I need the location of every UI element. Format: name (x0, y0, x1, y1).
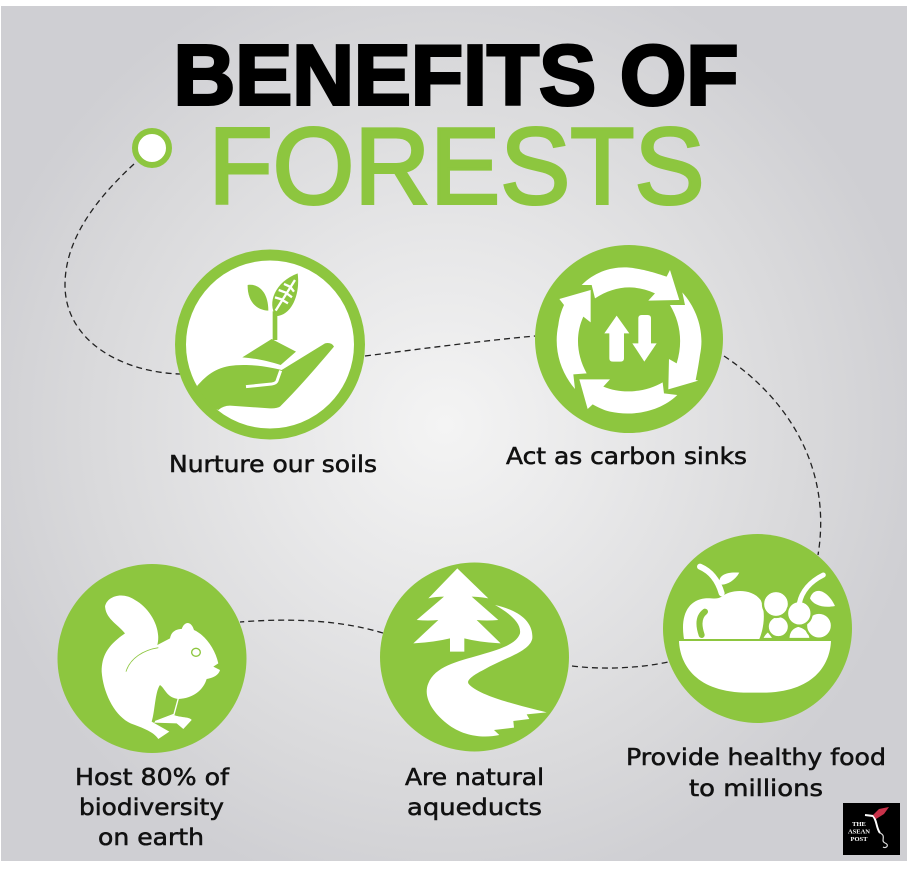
icon: tree and river (380, 562, 569, 752)
icon: carbon cycle arrows (535, 245, 723, 433)
logo: the asean post: POST (851, 836, 868, 843)
label: host 80% of biodiversity on earth (75, 765, 230, 851)
title: forests: FORESTS (208, 106, 704, 228)
dashed connector path (65, 164, 821, 668)
icon: hand holding seedling (180, 255, 360, 434)
logo: the asean post: THE (852, 821, 866, 828)
label: host 80% of biodiversity on earth: biodiversity (79, 795, 224, 821)
icon: squirrel (58, 564, 246, 753)
label: provide healthy food: Provide healthy food (626, 745, 886, 771)
label: provide healthy food: to millions (689, 776, 823, 802)
label: are natural aqueducts (405, 765, 544, 821)
logo: the asean post: ASEAN (848, 828, 870, 836)
logo: the asean post (843, 803, 900, 855)
label: host 80% of biodiversity on earth: Host 80% of (75, 765, 230, 791)
label: nurture our soils: Nurture our soils (169, 452, 377, 478)
title: benefits of: BENEFITS OF (174, 28, 738, 124)
label: provide healthy food (626, 745, 886, 802)
label: host 80% of biodiversity on earth: on earth (98, 825, 204, 851)
label: are natural aqueducts: aqueducts (407, 795, 542, 821)
label: are natural aqueducts: Are natural (405, 765, 544, 791)
path start marker (135, 131, 169, 165)
label: act as carbon sinks: Act as carbon sinks (506, 444, 747, 470)
icon: fruit bowl (663, 534, 852, 723)
